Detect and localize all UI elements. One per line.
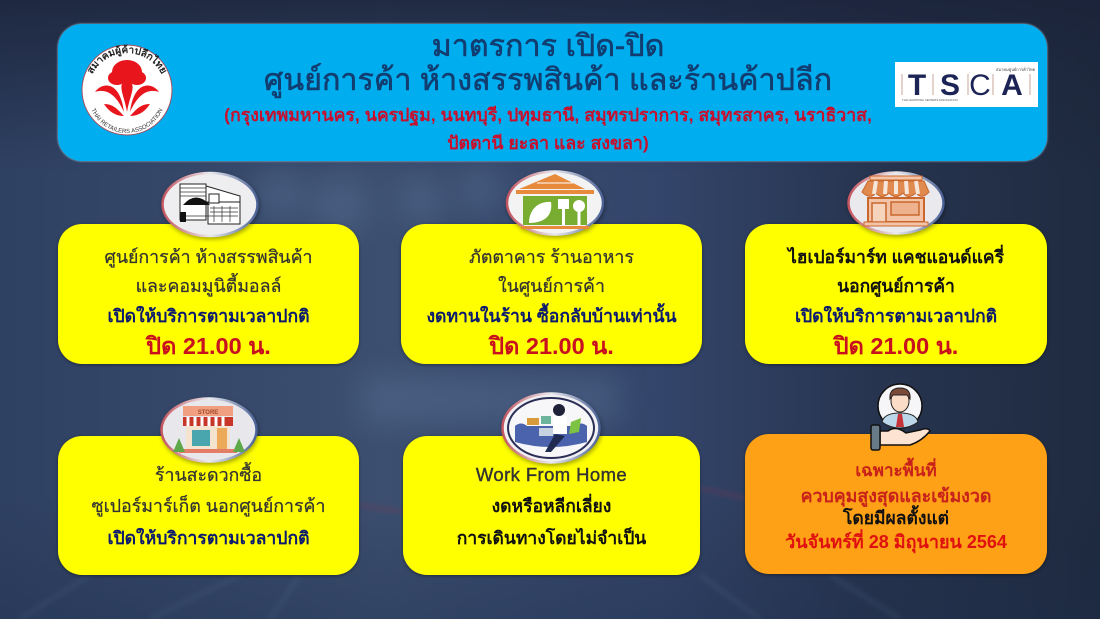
text: card lines: [92, 462, 325, 548]
text: card lines: เปิดให้บริการตามเวลาปกติ: [107, 306, 310, 326]
text: card lines: ควบคุมสูงสุดและเข้มงวด: [801, 486, 991, 506]
panel: strict control area card: [745, 434, 1047, 574]
icon: Thai Retailers Association logo: สมาคมผู้ค้าปลีกไทย: [88, 44, 166, 74]
text: card lines: และคอมมูนิตี้มอลล์: [136, 276, 281, 296]
icon: work from home badge: [500, 392, 604, 468]
icon: TSCA logo: สมาคมศูนย์การค้าไทย: [996, 67, 1035, 73]
text: card lines: ซูเปอร์มาร์เก็ต นอกศูนย์การค้า: [92, 496, 325, 516]
panel: work from home card: [403, 436, 700, 575]
icon: storefront badge: [847, 171, 946, 240]
text: card lines: [426, 247, 677, 359]
text: card lines: วันจันทร์ที่ 28 มิถุนายน 2564: [785, 532, 1007, 552]
text: card lines: งดทานในร้าน ซื้อกลับบ้านเท่านั้น: [426, 306, 677, 326]
icon: TSCA logo: T: [908, 69, 926, 102]
text: card lines: ในศูนย์การค้า: [498, 276, 605, 296]
panel: hypermarket card: [745, 224, 1047, 364]
icon: Thai Retailers Association logo: [82, 44, 172, 136]
text: card lines: โดยมีผลตั้งแต่: [843, 508, 949, 528]
icon: restaurant badge: [505, 170, 607, 240]
text: card lines: [457, 464, 646, 548]
text: card lines: ไฮเปอร์มาร์ท แคชแอนด์แครี่: [788, 247, 1004, 267]
heading: title line 2: ศูนย์การค้า ห้างสรรพสินค้า และร้านค้าปลีก: [264, 63, 832, 97]
icon: TSCA logo: A: [1001, 69, 1023, 102]
text: card lines: ปิด 21.00 น.: [834, 333, 958, 359]
text: card lines: ปิด 21.00 น.: [146, 333, 271, 359]
text: card lines: เปิดให้บริการตามเวลาปกติ: [107, 528, 310, 548]
panel: shopping centres card: [58, 224, 359, 364]
text: card lines: Work From Home: [476, 464, 627, 485]
icon: person on open hand: [870, 383, 931, 451]
text: card lines: ร้านสะดวกซื้อ: [155, 465, 262, 485]
panel: header banner: [58, 24, 1047, 161]
text: card lines: การเดินทางโดยไม่จำเป็น: [457, 528, 646, 548]
icon: TSCA logo: S: [940, 69, 960, 102]
panel: convenience stores card: [58, 436, 359, 575]
icon: convenience store badge: [159, 397, 261, 468]
text: card lines: งดหรือหลีกเลี่ยง: [492, 496, 611, 516]
icon: convenience store badge: STORE: [198, 410, 218, 416]
text: card lines: [105, 247, 312, 359]
text: card lines: [786, 244, 1004, 359]
text: card lines: เปิดให้บริการตามเวลาปกติ: [795, 306, 997, 326]
text: province list line 2: ปัตตานี ยะลา และ สงขลา): [447, 133, 649, 153]
heading: title line 1: มาตรการ เปิด-ปิด: [432, 29, 664, 63]
text: province list line 1: (กรุงเทพมหานคร, นครปฐม, นนทบุรี, ปทุมธานี, สมุทรปราการ, สมุทรสาคร, นราธิวาส,: [224, 105, 872, 125]
text: card lines: นอกศูนย์การค้า: [837, 276, 955, 296]
icon: TSCA logo: C: [969, 69, 991, 102]
text: card lines: ภัตตาคาร ร้านอาหาร: [469, 247, 634, 267]
text: card lines: [785, 458, 1007, 554]
text: card lines: ศูนย์การค้า ห้างสรรพสินค้า: [105, 247, 312, 267]
icon: shopping mall badge: [160, 172, 262, 242]
text: card lines: ปิด 21.00 น.: [489, 333, 614, 359]
text: card lines: เฉพาะพื้นที่: [855, 461, 937, 480]
icon: TSCA logo: [895, 62, 1038, 107]
icon: TSCA logo: THAI SHOPPING CENTERS ASSOCIATION: [902, 98, 958, 102]
icon: Thai Retailers Association logo: THAI RETAILERS ASSOCIATION: [92, 108, 162, 133]
panel: restaurants card: [401, 224, 702, 364]
